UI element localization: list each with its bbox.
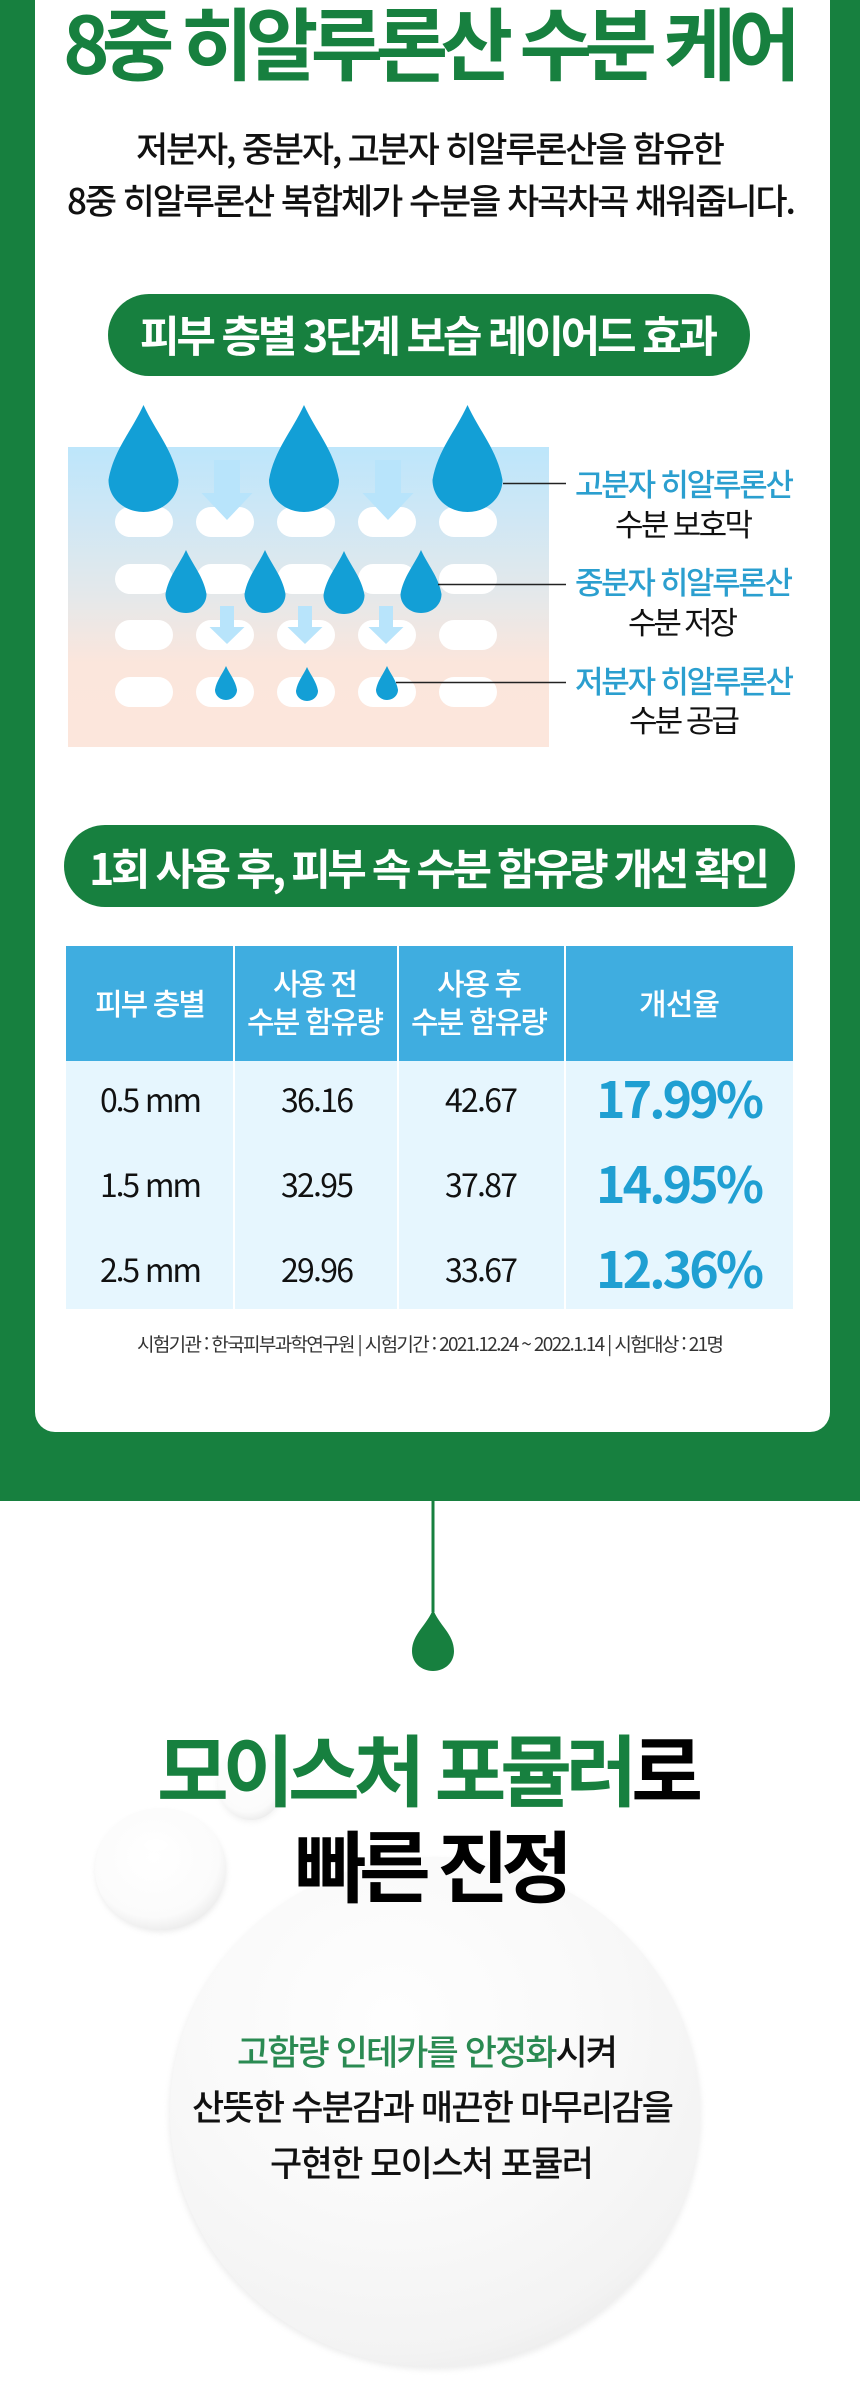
row 0.5 mm: [100, 1061, 764, 1133]
label: high molecular: 고분자 히알루론산: [575, 460, 794, 505]
row 1.5 mm: 1.5 mm: [100, 1161, 202, 1207]
bubble text: [192, 2025, 674, 2187]
row 0.5 mm: 36.16: [281, 1076, 354, 1122]
label: medium molecular: [575, 558, 793, 643]
bubble text: 고함량 인테카를 안정화시켜: [237, 2025, 618, 2076]
green section background: [0, 0, 860, 1501]
table header: 수분 함유량: [411, 998, 548, 1042]
pill heading: layer effect: 피부 층별 3단계 보습 레이어드 효과: [140, 303, 718, 365]
intro text: 저분자, 중분자, 고분자 히알루론산을 함유한: [136, 122, 725, 173]
label: medium molecular: 중분자 히알루론산: [575, 558, 793, 603]
large arrows: [202, 460, 414, 520]
table header: 사용 전: [273, 960, 358, 1004]
table header: [66, 946, 793, 1061]
section title: 모이스처 포뮬러로: [157, 1711, 703, 1823]
label: high molecular: 수분 보호막: [615, 500, 753, 545]
row 0.5 mm: 42.67: [445, 1076, 518, 1122]
test footnote: 시험기관 : 한국피부과학연구원 | 시험기간 : 2021.12.24 ~ 2022.1.14 | 시험대상 : 21명: [137, 1330, 724, 1357]
small water drops: [215, 666, 398, 701]
pill heading: moisture content: 1회 사용 후, 피부 속 수분 함유량 개선 확인: [89, 836, 770, 898]
row 2.5 mm: 29.96: [281, 1246, 354, 1292]
row 1.5 mm: [100, 1146, 764, 1218]
label: high molecular: [575, 460, 794, 545]
small cream droplet behind title: [218, 1744, 284, 1822]
results table: [66, 946, 793, 1309]
label: low molecular: 저분자 히알루론산: [575, 657, 794, 702]
column separators: [233, 946, 566, 1309]
label: medium molecular: 수분 저장: [628, 598, 738, 643]
medium cream droplet: [95, 1808, 226, 1932]
section title: [157, 1711, 703, 1919]
large cream bubble: [169, 1857, 701, 2370]
pill heading: layer effect: [108, 294, 750, 376]
row 2.5 mm: 33.67: [445, 1246, 518, 1292]
row 2.5 mm: 2.5 mm: [100, 1246, 202, 1292]
row 1.5 mm: 37.87: [445, 1161, 518, 1207]
skin gradient panel: [68, 447, 549, 747]
skin layer diagram: [68, 405, 794, 747]
leader lines: [396, 484, 566, 682]
label: low molecular: 수분 공급: [629, 696, 740, 741]
section title: 빠른 진정: [295, 1807, 573, 1919]
row 1.5 mm: 14.95%: [596, 1146, 764, 1218]
table header: 피부 층별: [95, 980, 206, 1024]
intro text: [67, 122, 796, 225]
bubble text: 산뜻한 수분감과 매끈한 마무리감을: [192, 2080, 674, 2131]
intro text: 8중 히알루론산 복합체가 수분을 차곡차곡 채워줍니다.: [67, 174, 796, 225]
row 2.5 mm: [100, 1231, 764, 1303]
bubble text: 구현한 모이스처 포뮬러: [270, 2136, 594, 2187]
row 1.5 mm: 32.95: [281, 1161, 354, 1207]
row 0.5 mm: 17.99%: [596, 1061, 764, 1133]
connector line and green drop: [412, 1500, 454, 1671]
table body: [66, 1061, 793, 1309]
table header: 개선율: [639, 980, 720, 1024]
table header: 수분 함유량: [247, 998, 384, 1042]
large water drops: [108, 405, 502, 512]
table header: 사용 후: [437, 960, 522, 1004]
row 2.5 mm: 12.36%: [596, 1231, 764, 1303]
label: low molecular: [575, 657, 794, 741]
skin cells: [115, 507, 497, 707]
small arrows: [210, 606, 404, 644]
row 0.5 mm: 0.5 mm: [100, 1076, 202, 1122]
medium water drops: [166, 550, 442, 614]
white card panel: [35, 0, 830, 1432]
